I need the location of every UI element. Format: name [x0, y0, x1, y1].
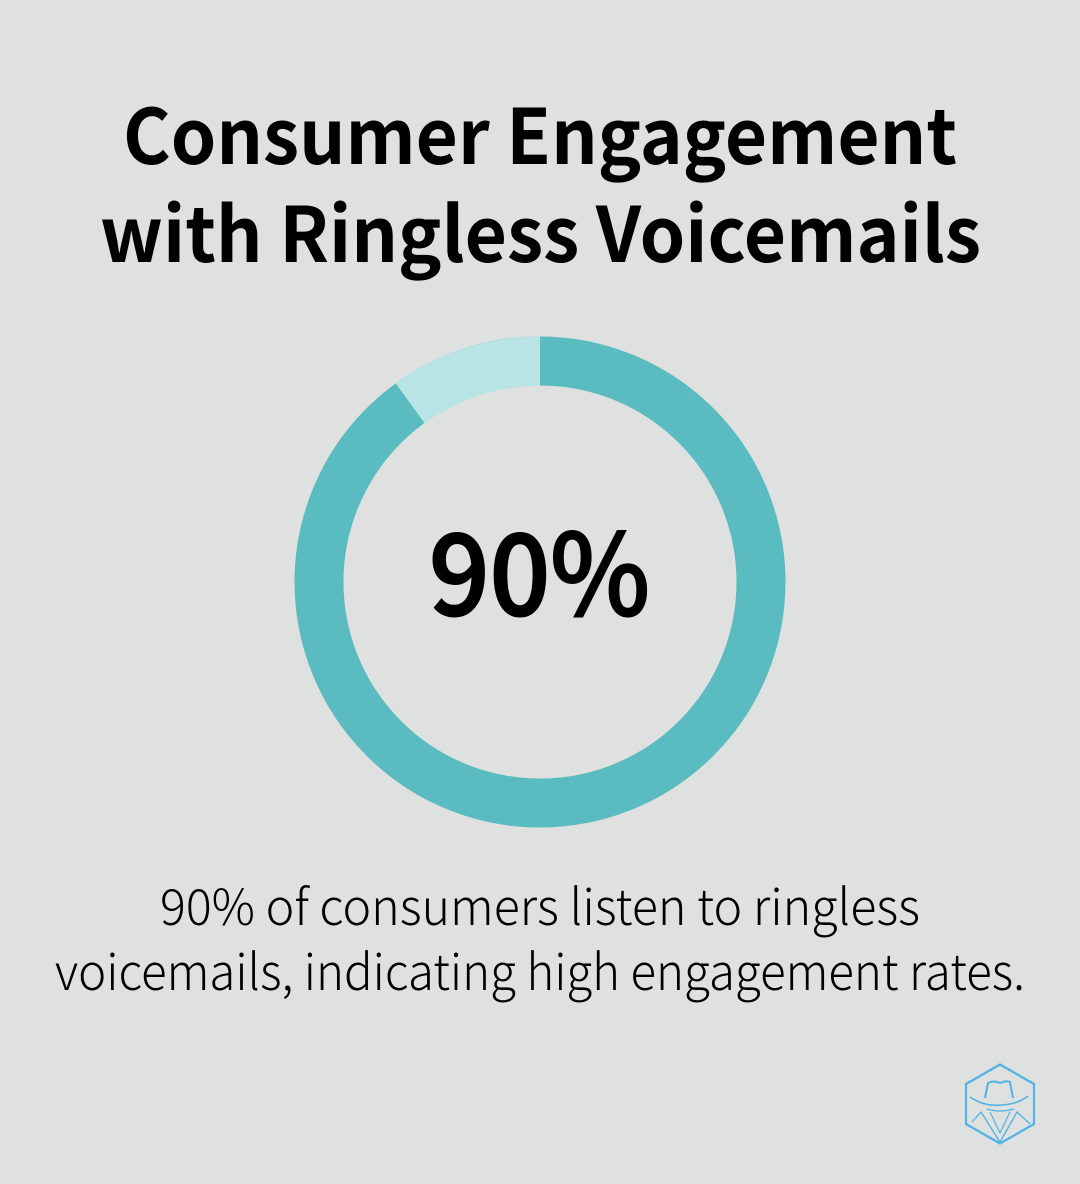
title: Consumer Engagement [123, 76, 957, 186]
donut chart: 90% [319, 361, 761, 803]
donut value: 90% [429, 486, 650, 648]
icon: logo, hexagon with hat [966, 1064, 1034, 1144]
description [55, 868, 1025, 1005]
title [100, 76, 981, 284]
title: with Ringless Voicemails [100, 174, 981, 284]
description: voicemails, indicating high engagement rates. [55, 933, 1025, 1005]
description: 90% of consumers listen to ringless [160, 868, 920, 940]
